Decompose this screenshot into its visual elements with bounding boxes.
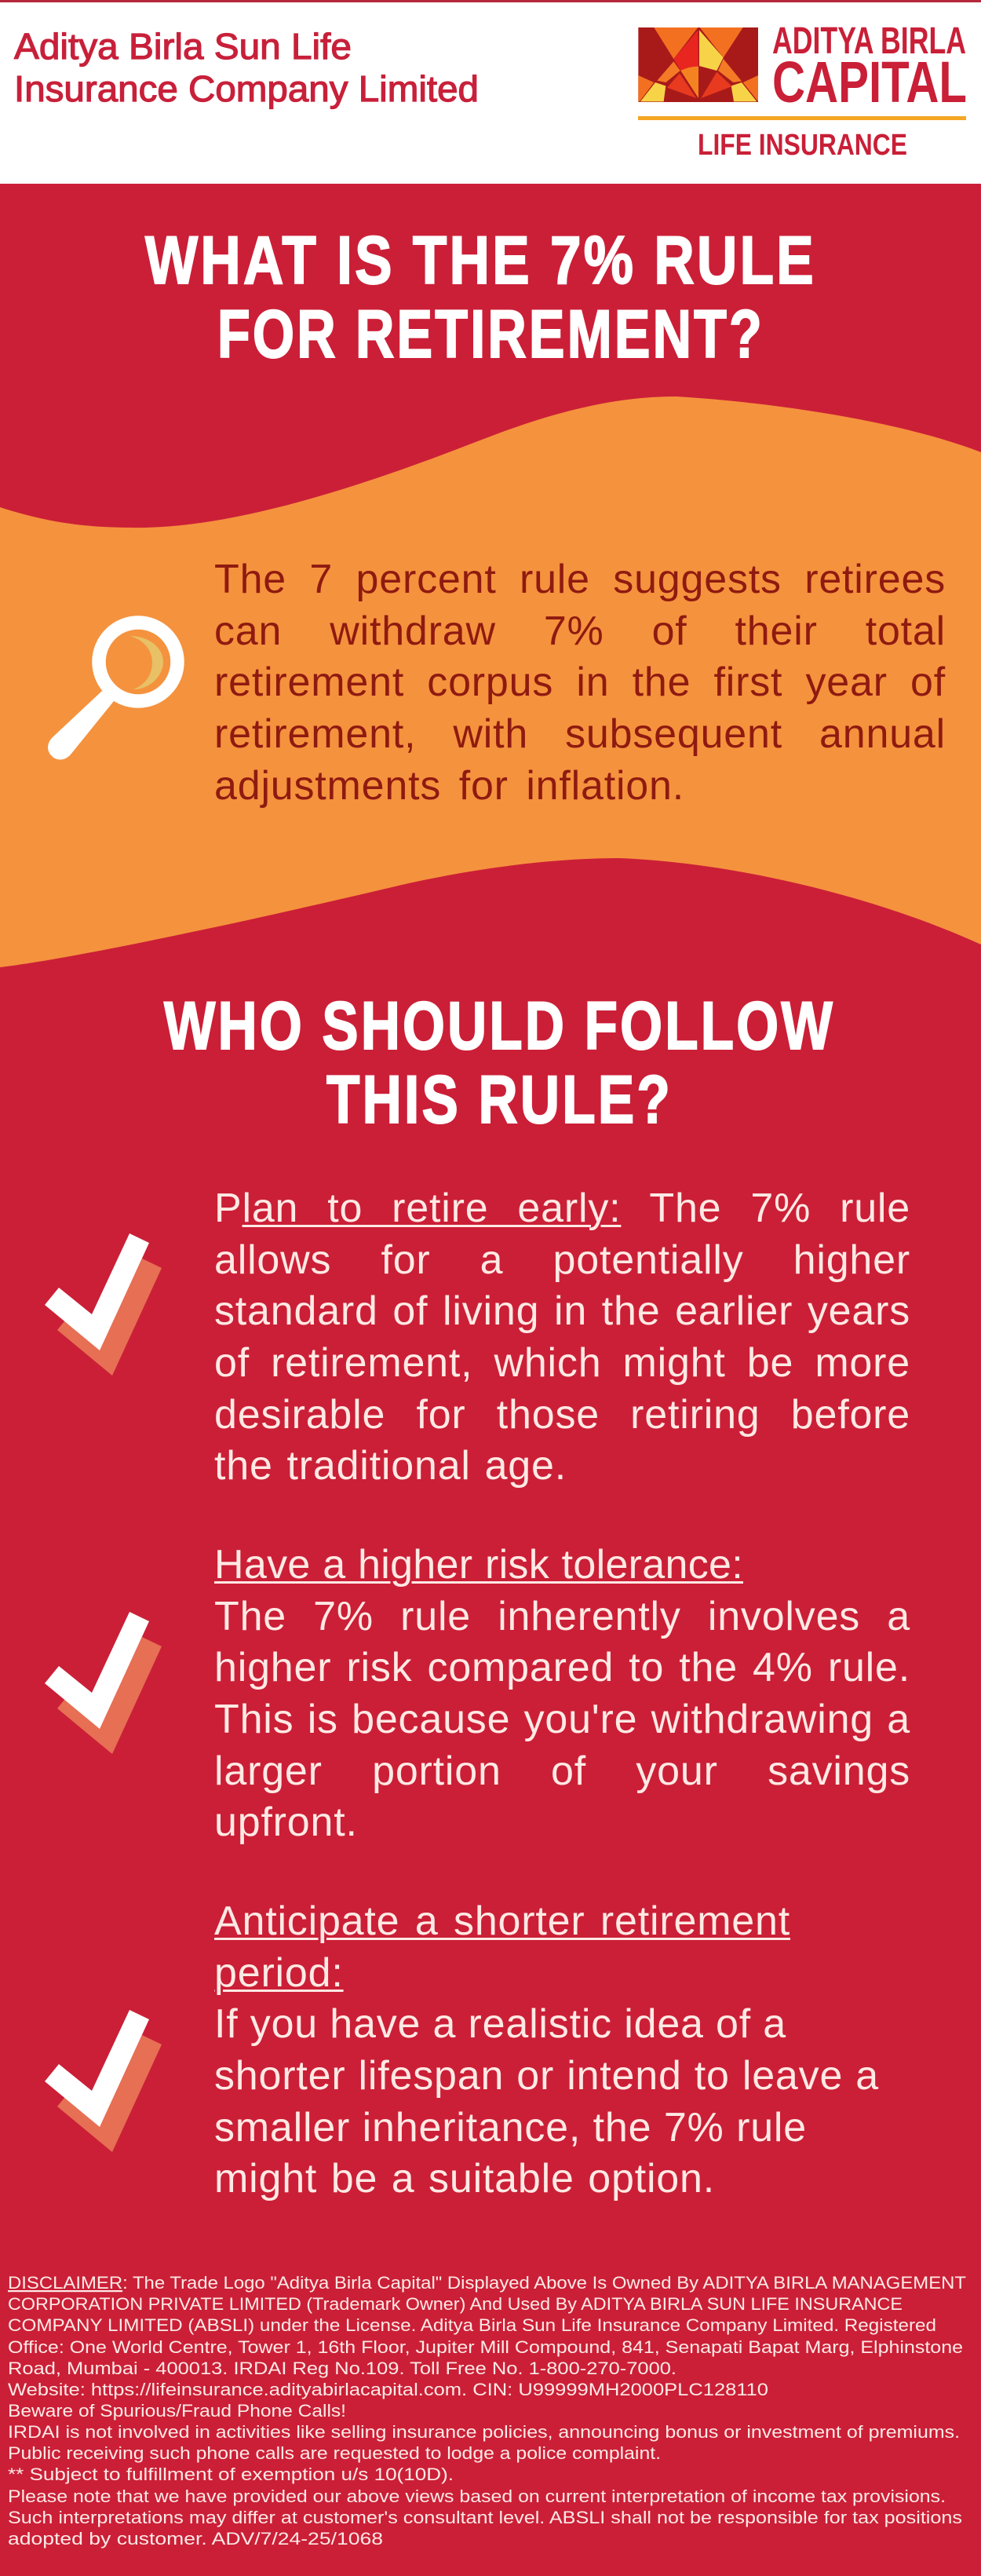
text block: higher risk tolerance: higher risk compared to the 4% rule. — [214, 1645, 910, 1690]
text block: plan to retire early: of retirement, which might be more — [214, 1340, 910, 1386]
text block: higher risk tolerance — [214, 1542, 910, 1845]
logo: Aditya Birla Capital — [638, 20, 967, 162]
logo wordmark — [772, 20, 967, 115]
disclaimer text: Please note that we have provided our above views based on current interpretation of income tax provisions. — [8, 2486, 946, 2506]
disclaimer text: COMPANY LIMITED (ABSLI) under the License. Aditya Birla Sun Life Insurance Company Limited. Registered — [8, 2315, 936, 2335]
text block: higher risk tolerance: Have a higher risk tolerance: — [214, 1542, 743, 1588]
disclaimer text: Public receiving such phone calls are requested to lodge a police complaint. — [8, 2443, 661, 2463]
icon: check mark 1 — [45, 1233, 162, 1376]
icon: check mark 2 — [45, 1612, 162, 1754]
title — [145, 223, 816, 372]
header band — [0, 0, 981, 184]
disclaimer text — [8, 2273, 966, 2549]
disclaimer text: adopted by customer. ADV/7/24-25/1068 — [8, 2529, 383, 2549]
text block: definition of the 7 percent rule: adjustments for inflation. — [214, 763, 684, 809]
text block: definition of the 7 percent rule: The 7 percent rule suggests retirees — [214, 557, 946, 602]
orange wave panel — [0, 396, 981, 967]
disclaimer text: Website: https://lifeinsurance.adityabirlacapital.com. CIN: U99999MH2000PLC128110 — [8, 2380, 768, 2399]
text block: definition of the 7 percent rule: retirement corpus in the first year of — [214, 660, 946, 705]
text block: plan to retire early: standard of living in the earlier years — [214, 1288, 910, 1334]
disclaimer text: Road, Mumbai - 400013. IRDAI Reg No.109. Toll Free No. 1-800-270-7000. — [8, 2359, 676, 2378]
text block: higher risk tolerance: The 7% rule inherently involves a — [214, 1594, 910, 1639]
heading: who should follow: THIS RULE? — [326, 1062, 673, 1138]
disclaimer text: Office: One World Centre, Tower 1, 16th Floor, Jupiter Mill Compound, 841, Senapati Bapat Marg, Elphinstone — [8, 2337, 963, 2357]
company name: Insurance Company Limited — [14, 68, 479, 109]
text block: plan to retire early: the traditional age. — [214, 1443, 567, 1489]
text block: plan to retire early: desirable for those retiring before — [214, 1392, 910, 1438]
text block: higher risk tolerance: upfront. — [214, 1800, 358, 1845]
text block: shorter retirement period: If you have a realistic idea of a — [214, 2001, 786, 2047]
heading: who should follow — [164, 988, 835, 1138]
text block: definition of the 7 percent rule — [214, 557, 946, 809]
heading: who should follow: WHO SHOULD FOLLOW — [164, 988, 835, 1064]
disclaimer text: Such interpretations may differ at customer's consultant level. ABSLI shall not be responsible for tax positions — [8, 2508, 962, 2527]
disclaimer text: CORPORATION PRIVATE LIMITED (Trademark Owner) And Used By ADITYA BIRLA SUN LIFE INSURANCE — [8, 2294, 903, 2314]
logo divider bar — [638, 116, 966, 120]
text block: definition of the 7 percent rule: can withdraw 7% of their total — [214, 608, 946, 654]
logo mark — [638, 27, 758, 102]
text block: plan to retire early — [214, 1186, 910, 1489]
title: WHAT IS THE 7% RULE — [145, 223, 816, 298]
text block: plan to retire early: allows for a potentially higher — [214, 1237, 910, 1283]
text block: shorter retirement period: smaller inheritance, the 7% rule — [214, 2105, 807, 2150]
text block: plan to retire early: Plan to retire early: The 7% rule — [214, 1186, 910, 1231]
disclaimer text: ** Subject to fulfillment of exemption u/s 10(10D). — [8, 2465, 454, 2484]
text block: shorter retirement period — [214, 1898, 879, 2201]
text block: higher risk tolerance: larger portion of your savings — [214, 1748, 910, 1794]
text block: definition of the 7 percent rule: retirement, with subsequent annual — [214, 711, 946, 757]
disclaimer text: Beware of Spurious/Fraud Phone Calls! — [8, 2401, 346, 2421]
text block: shorter retirement period: might be a suitable option. — [214, 2156, 715, 2201]
icon: magnifying glass — [48, 623, 177, 760]
text block: higher risk tolerance: This is because you're withdrawing a — [214, 1697, 910, 1742]
company name: Aditya Birla Sun Life — [14, 26, 352, 67]
text block: shorter retirement period: Anticipate a shorter retirement — [214, 1898, 790, 1944]
text block: shorter retirement period: shorter lifespan or intend to leave a — [214, 2053, 879, 2099]
disclaimer text: DISCLAIMER : The Trade Logo "Aditya Birla Capital" Displayed Above Is Owned By ADITYA BIRLA MANAGEMENT — [8, 2273, 966, 2293]
disclaimer text: IRDAI is not involved in activities like selling insurance policies, announcing bonus or investment of premiums. — [8, 2422, 960, 2442]
logo sub-brand: LIFE INSURANCE — [698, 129, 907, 162]
text block: shorter retirement period: period: — [214, 1950, 344, 1996]
title: FOR RETIREMENT? — [217, 297, 764, 372]
icon: check mark 3 — [45, 2010, 162, 2152]
company name — [14, 26, 479, 109]
